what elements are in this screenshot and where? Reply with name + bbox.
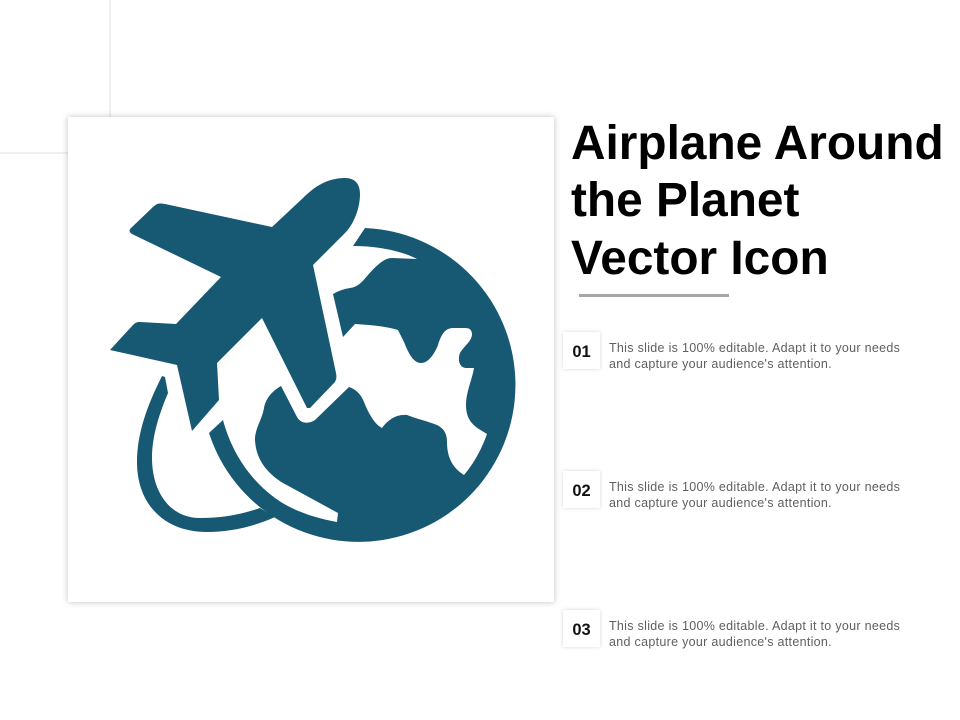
number badge 02: 02: [572, 482, 591, 500]
number badge 01: 01: [572, 343, 591, 361]
text block 01: [609, 341, 900, 371]
text block 03: This slide is 100% editable. Adapt it to your needs: [609, 619, 900, 633]
title: the Planet: [571, 174, 799, 227]
title: [571, 117, 944, 285]
icon: globe: [209, 228, 515, 542]
icon: airplane: [110, 178, 360, 431]
number badge 02: [563, 471, 600, 508]
number badge 01: [563, 332, 600, 369]
text block 01: and capture your audience's attention.: [609, 357, 832, 371]
text block 02: and capture your audience's attention.: [609, 496, 832, 510]
panel: icon card: [68, 117, 554, 602]
text block 03: and capture your audience's attention.: [609, 635, 832, 649]
title: Vector Icon: [571, 232, 829, 285]
text block 03: [609, 619, 900, 649]
title: Airplane Around: [571, 117, 944, 170]
number badge 03: 03: [572, 621, 591, 639]
text block 01: This slide is 100% editable. Adapt it to your needs: [609, 341, 900, 355]
icon: flight path swoosh: [137, 376, 275, 532]
text block 02: [609, 480, 900, 510]
text block 02: This slide is 100% editable. Adapt it to your needs: [609, 480, 900, 494]
number badge 03: [563, 610, 600, 647]
